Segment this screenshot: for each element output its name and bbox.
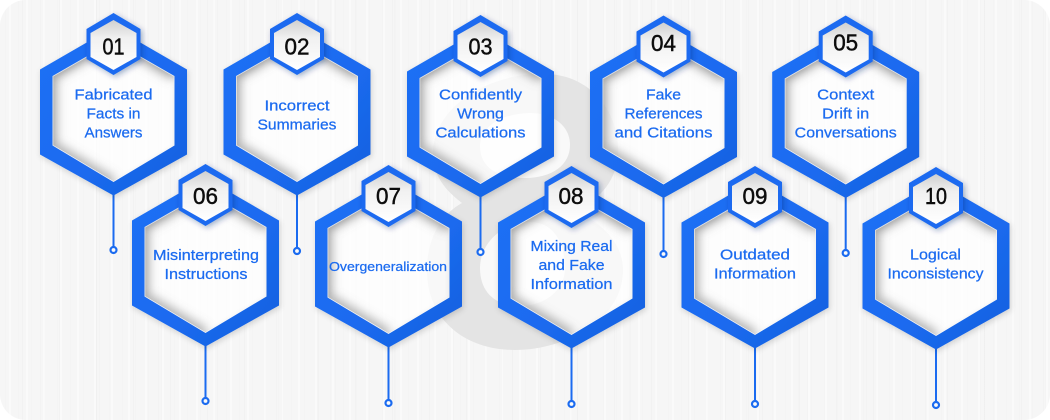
label 02: Incorrect [264,98,330,114]
hexagon 03 [407,15,554,198]
connector 06 [202,345,208,404]
hexagon 10 [862,167,1010,350]
label 01: Facts in [86,106,140,122]
connector 01 [110,194,116,253]
item 05: Context Drift in Conversations [772,16,919,256]
connector 03 [478,196,484,255]
connector 04 [660,197,666,257]
label 05: Drift in [822,106,869,122]
hexagon 05 [772,16,919,198]
connector 09 [752,347,758,407]
label 10: Logical [910,246,961,264]
item 01: Fabricated Facts in Answers [40,13,187,253]
connector 05 [843,197,849,256]
label 08: Mixing Real [530,238,612,255]
background ghost numeral [427,74,623,350]
hexagon 01 [40,13,187,196]
label 04: References [624,106,702,122]
hexagon 09 [682,166,828,348]
label 09: Information [714,266,796,282]
connector 07 [386,346,392,406]
label 06: Misinterpreting [153,247,259,264]
number 01: 01 [102,34,124,60]
label 03: Calculations [436,124,526,142]
label 02: Summaries [258,116,336,134]
label 09: Outdated [720,246,790,264]
label 08: Information [530,276,612,293]
label 04: and Citations [614,124,712,142]
item 06: Misinterpreting Instructions [132,164,279,404]
label 01: Fabricated [74,86,152,104]
connector 02 [294,194,300,254]
hexagon 04 [590,16,737,198]
label 10: Inconsistency [888,266,984,282]
label 04: Fake [646,86,681,104]
number 06: 06 [193,183,218,209]
connector 08 [568,347,574,407]
item 03: Confidently Wrong Calculations [407,15,554,255]
label 06: Instructions [164,266,248,283]
number 02: 02 [284,34,310,60]
item 08: Mixing Real and Fake Information [498,166,645,407]
label 07: Overgeneralization [329,260,447,274]
number 05: 05 [833,30,858,56]
item 09: Outdated Information [682,166,828,407]
number 04: 04 [651,30,676,56]
number 07: 07 [376,183,401,209]
item 04: Fake References and Citations [590,16,737,257]
item 07: Overgeneralization [315,165,462,406]
hexagon 07 [315,165,462,348]
number 08: 08 [558,183,584,209]
hexagon 08 [498,166,645,348]
label 08: and Fake [538,257,604,274]
hexagon 02 [224,13,370,196]
number 03: 03 [468,34,492,60]
label 05: Context [817,86,875,104]
label 03: Wrong [457,106,504,122]
label 03: Confidently [439,86,523,104]
number 09: 09 [742,183,768,209]
item 02: Incorrect Summaries [224,13,370,254]
connector 10 [933,349,939,408]
hexagon 06 [132,164,279,346]
item 10: Logical Inconsistency [862,167,1010,408]
number 10: 10 [925,183,947,209]
label 01: Answers [84,124,142,142]
label 05: Conversations [795,124,897,142]
